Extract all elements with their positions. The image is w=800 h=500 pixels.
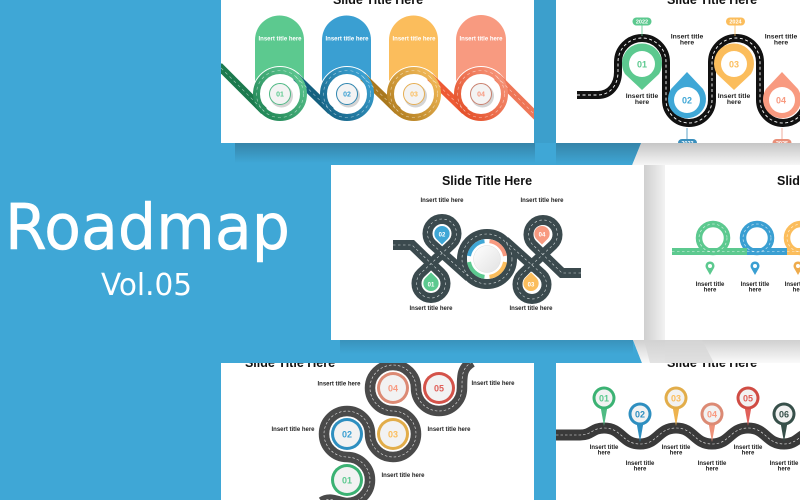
labels xyxy=(409,198,564,312)
centre wheel xyxy=(467,239,507,279)
labels: here xyxy=(749,288,762,294)
year badges: 2025 xyxy=(776,141,788,147)
rings xyxy=(699,224,800,252)
labels: here xyxy=(706,466,719,472)
panel shadows xyxy=(235,0,641,354)
number buttons: 04 xyxy=(477,92,485,98)
tab labels: Insert title here xyxy=(459,36,503,42)
pin 01 xyxy=(592,386,616,426)
pin 01: 01 xyxy=(637,60,647,70)
node 04 xyxy=(377,372,409,404)
road strands xyxy=(219,66,537,117)
labels: Insert title here xyxy=(317,382,361,388)
pin 03: 03 xyxy=(528,282,535,288)
labels: Insert title xyxy=(718,93,750,100)
labels: Insert title xyxy=(696,282,725,288)
node 02: 02 xyxy=(342,430,352,440)
road xyxy=(556,428,800,444)
pin 05: 05 xyxy=(743,394,753,404)
labels: here xyxy=(704,288,717,294)
background: grey chevron xyxy=(632,143,800,363)
black road xyxy=(577,38,800,123)
pin 05 xyxy=(736,386,760,426)
road dashes xyxy=(577,38,800,123)
panel: looped road slide xyxy=(219,0,537,143)
road dashes xyxy=(322,362,472,500)
pin 04 xyxy=(700,402,724,442)
labels: Insert title here xyxy=(520,198,564,204)
pin 02: 02 xyxy=(635,410,645,420)
labels: Insert title here xyxy=(509,306,553,312)
road dashes xyxy=(221,68,534,118)
pin 02 xyxy=(434,226,450,245)
panel: coil roads xyxy=(665,165,800,340)
labels: here xyxy=(774,40,788,46)
pin 02: 02 xyxy=(439,232,446,238)
step tabs xyxy=(255,15,506,82)
panel: wave road with pins xyxy=(556,356,800,500)
pin 03 xyxy=(664,386,688,426)
node 02 xyxy=(331,418,363,450)
pin 04: 04 xyxy=(707,410,717,420)
tab labels: Insert title here xyxy=(258,36,302,42)
road dashes xyxy=(672,224,800,252)
tab labels: Insert title here xyxy=(325,36,369,42)
labels: Insert title xyxy=(626,93,658,100)
node 01: 01 xyxy=(342,476,352,486)
slide title: Slide Title Here xyxy=(667,356,757,370)
labels: Insert title here xyxy=(420,198,464,204)
pin 02 xyxy=(668,72,706,118)
pin 03: 03 xyxy=(729,60,739,70)
number buttons: 01 xyxy=(276,92,284,98)
labels: Insert title xyxy=(662,445,691,451)
labels: Insert title here xyxy=(471,381,515,387)
pin 01 xyxy=(423,272,439,291)
node 04: 04 xyxy=(388,384,398,394)
labels: Insert title xyxy=(765,34,797,40)
pin 06: 06 xyxy=(779,410,789,420)
labels: Insert title here xyxy=(381,473,425,479)
labels: Insert title xyxy=(698,461,727,467)
node 03: 03 xyxy=(388,430,398,440)
road dashes xyxy=(556,428,800,444)
year badges: 2024 xyxy=(729,20,743,26)
labels: here xyxy=(778,466,791,472)
pin 03 xyxy=(714,43,754,90)
labels: Insert title xyxy=(734,445,763,451)
road xyxy=(393,219,581,299)
pin 04: 04 xyxy=(539,232,546,238)
pin 03 xyxy=(523,272,539,291)
pin 01: 01 xyxy=(599,394,609,404)
labels: here xyxy=(670,450,683,456)
labels: Insert title xyxy=(741,282,770,288)
pin 01: 01 xyxy=(428,282,435,288)
subtitle: Vol.05: Vol.05 xyxy=(101,268,192,303)
labels: Insert title xyxy=(770,461,799,467)
pin 04 xyxy=(763,72,800,118)
labels: Insert title here xyxy=(427,427,471,433)
slide title: Slide Title Here xyxy=(245,356,335,370)
labels: Insert title here xyxy=(409,306,453,312)
panel: winding road with pins xyxy=(556,0,800,147)
title: Roadmap: Roadmap xyxy=(5,191,290,264)
number buttons: 03 xyxy=(410,92,418,98)
labels: here xyxy=(598,450,611,456)
flat roads xyxy=(672,248,800,255)
panel: knot road with centre wheel xyxy=(331,165,644,340)
labels: here xyxy=(635,99,649,106)
node 05 xyxy=(423,372,455,404)
node 05: 05 xyxy=(434,384,444,394)
labels: here xyxy=(680,40,694,46)
tab labels: Insert title here xyxy=(392,36,436,42)
number buttons: 02 xyxy=(343,92,351,98)
labels xyxy=(271,381,515,479)
number buttons xyxy=(270,84,494,108)
road xyxy=(322,362,472,500)
pin 06 xyxy=(772,402,796,442)
labels: here xyxy=(742,450,755,456)
tab labels xyxy=(258,36,502,40)
road dashes xyxy=(393,219,581,299)
pin 01 xyxy=(622,43,662,90)
labels xyxy=(590,445,799,472)
road rings xyxy=(256,70,504,118)
labels xyxy=(626,34,797,106)
labels: Insert title here xyxy=(271,427,315,433)
year badges xyxy=(632,18,792,147)
pin 04: 04 xyxy=(776,96,786,106)
year badges: 2022 xyxy=(636,20,648,26)
labels: here xyxy=(634,466,647,472)
pin 02 xyxy=(628,402,652,442)
white halos xyxy=(255,66,505,90)
slide title: Slide Title Here xyxy=(442,174,532,188)
year badges: 2023 xyxy=(681,141,694,147)
labels xyxy=(696,282,800,292)
pin 02: 02 xyxy=(682,96,692,106)
labels: Insert title xyxy=(590,445,619,451)
labels: Insert title xyxy=(671,34,703,40)
pin 04 xyxy=(534,226,550,245)
labels: Insert title xyxy=(626,461,655,467)
pin 03: 03 xyxy=(671,394,681,404)
node 01 xyxy=(331,464,363,496)
location pins xyxy=(706,261,800,275)
labels: here xyxy=(727,99,741,106)
panel: serpentine road xyxy=(221,356,534,500)
node 03 xyxy=(377,418,409,450)
